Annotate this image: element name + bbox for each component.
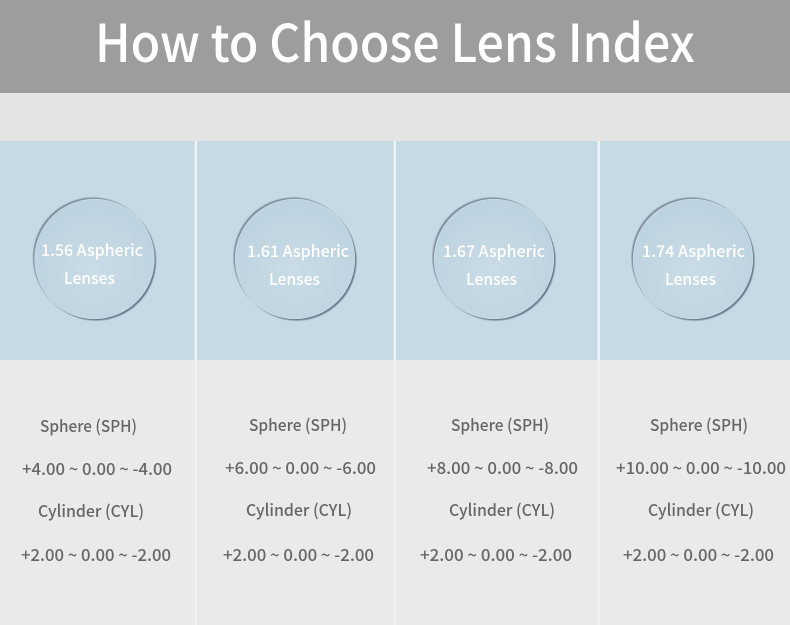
lens 1 label: 1.56 Aspheric — [41, 237, 143, 261]
lens 4 — [632, 198, 754, 320]
title: How to Choose Lens Index — [95, 2, 695, 77]
lens 4 label: 1.74 Aspheric — [642, 238, 745, 262]
specs: column 4: Sphere (SPH) — [650, 412, 748, 436]
header bar — [0, 0, 790, 93]
lens 4 label: Lenses — [665, 266, 716, 290]
specs: column 1: Sphere (SPH) — [40, 413, 137, 437]
column dividers — [194, 141, 600, 625]
specs: column 3: Sphere (SPH) — [451, 412, 549, 436]
lens 3 label: Lenses — [466, 266, 517, 290]
specs: column 3: Cylinder (CYL) — [449, 497, 555, 521]
specs: column 2 — [223, 412, 376, 566]
lens 2 label: Lenses — [269, 266, 320, 290]
lens 2 — [234, 198, 356, 320]
specs: column 2: Sphere (SPH) — [249, 412, 347, 436]
lens 2 label: 1.61 Aspheric — [247, 238, 349, 262]
lens 3 label: 1.67 Aspheric — [443, 238, 545, 262]
specs: column 1: Cylinder (CYL) — [38, 498, 144, 522]
lens 1 label: Lenses — [64, 265, 115, 289]
specs: column 3: +8.00 ~ 0.00 ~ -8.00 — [427, 455, 578, 479]
lens 3 — [432, 198, 556, 320]
specs: column 3: +2.00 ~ 0.00 ~ -2.00 — [420, 542, 572, 566]
specs: column 2: +2.00 ~ 0.00 ~ -2.00 — [223, 542, 374, 566]
specs: column 2: Cylinder (CYL) — [246, 497, 352, 521]
band: upper grey — [0, 93, 790, 141]
specs: column 2: +6.00 ~ 0.00 ~ -6.00 — [225, 455, 376, 479]
lens 1 — [33, 198, 156, 320]
specs: column 1 — [21, 413, 172, 566]
lens 4 label — [642, 238, 745, 290]
specs: column 1: +2.00 ~ 0.00 ~ -2.00 — [21, 542, 171, 566]
lens 3 label — [443, 238, 545, 290]
lens 2 label — [247, 238, 349, 290]
specs: column 3 — [420, 412, 578, 566]
blue band — [0, 141, 790, 360]
lens 1 label — [41, 237, 143, 289]
specs: column 4: Cylinder (CYL) — [648, 497, 754, 521]
specs: column 4: +2.00 ~ 0.00 ~ -2.00 — [623, 542, 774, 566]
specs: column 4 — [616, 412, 786, 566]
specs: column 1: +4.00 ~ 0.00 ~ -4.00 — [22, 456, 172, 480]
specs: column 4: +10.00 ~ 0.00 ~ -10.00 — [616, 455, 786, 479]
